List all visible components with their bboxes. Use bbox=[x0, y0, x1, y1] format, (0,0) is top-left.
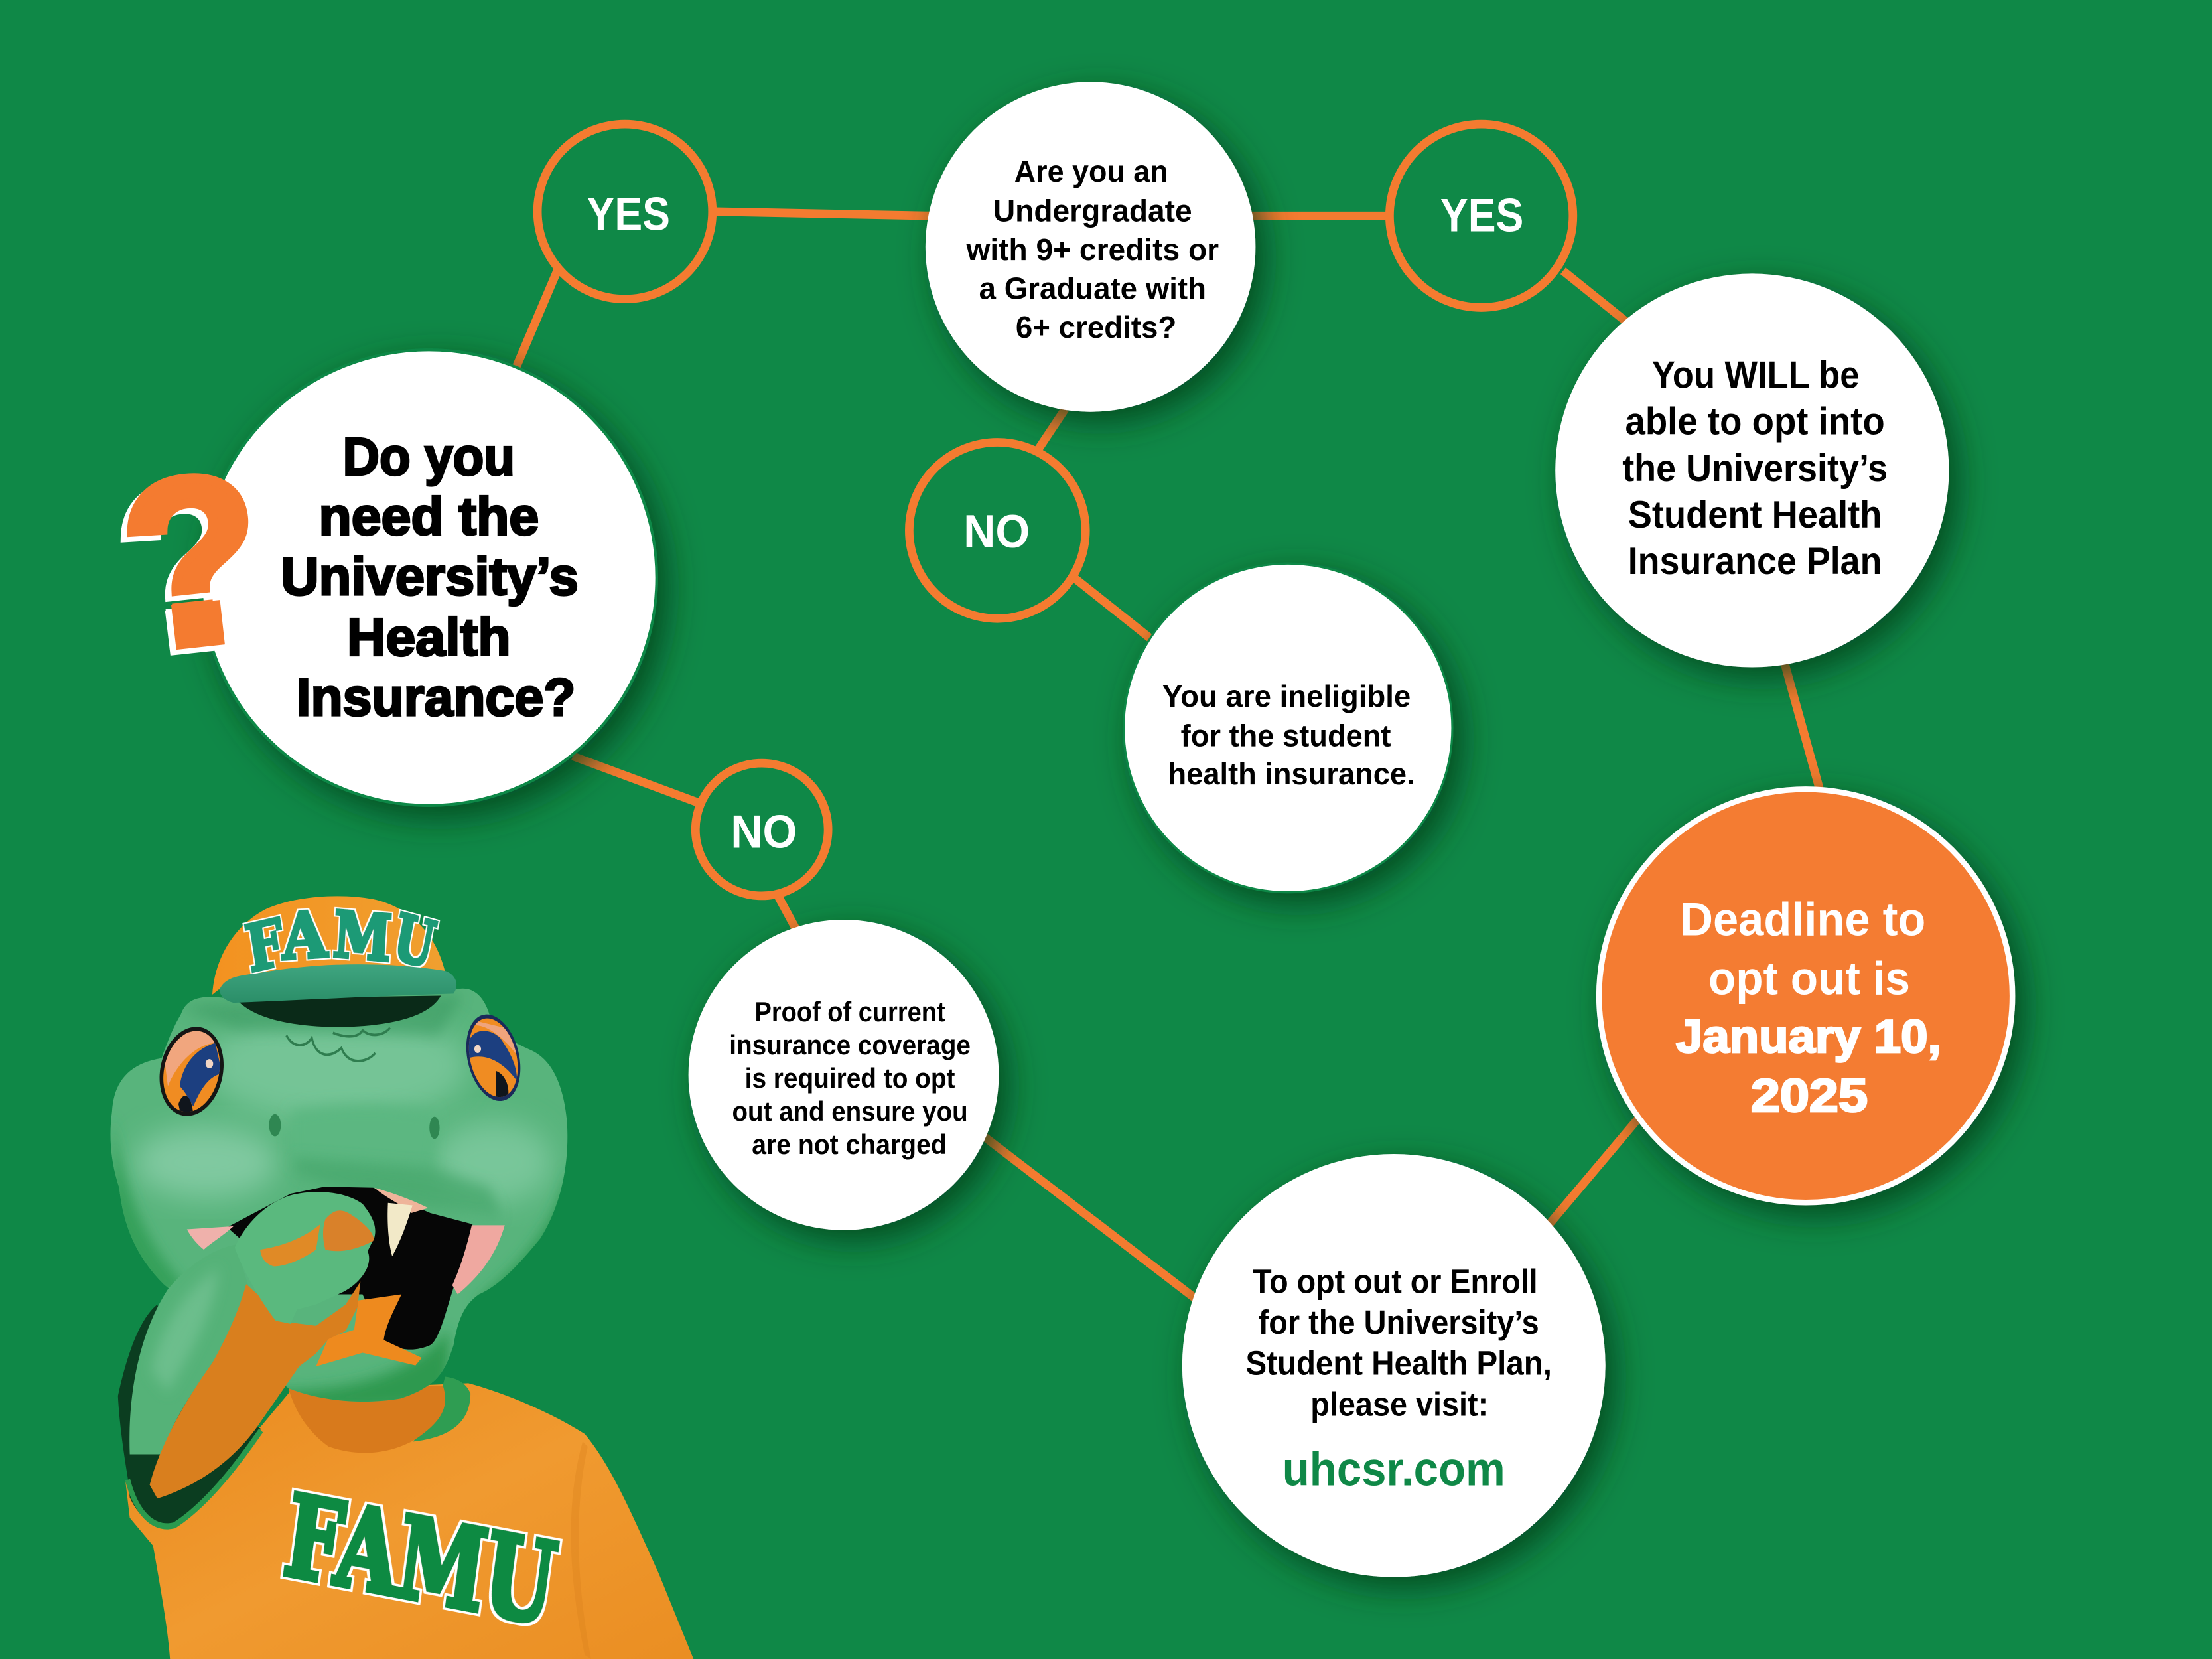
connector lines bbox=[516, 212, 1820, 1299]
panel: proof of coverage: out and ensure you bbox=[732, 1096, 968, 1127]
heading: main question: need the bbox=[319, 487, 539, 546]
mascot sleeve cuff bbox=[118, 1305, 261, 1526]
panel: opt out instructions: for the University’s bbox=[1259, 1303, 1539, 1341]
NO badge, lower: NO bbox=[730, 806, 797, 858]
palate bbox=[374, 1188, 428, 1213]
YES badge, second: YES bbox=[1440, 189, 1523, 242]
nostrils bbox=[269, 1114, 440, 1139]
panel: proof of coverage: are not charged bbox=[752, 1129, 947, 1160]
panel: opt in result: You WILL be bbox=[1652, 354, 1859, 397]
right gum bbox=[452, 1225, 505, 1294]
panel: ineligible result bbox=[1124, 563, 1452, 893]
panel: opt in result: the University’s bbox=[1622, 447, 1888, 490]
cuff trim bbox=[127, 1431, 261, 1526]
heading: main question: Health bbox=[347, 607, 511, 666]
panel: opt out instructions: please visit: bbox=[1310, 1385, 1488, 1423]
hand orange palm bbox=[150, 1281, 360, 1498]
brow scales bbox=[287, 1028, 390, 1061]
panel: opt in result: Insurance Plan bbox=[1628, 540, 1882, 583]
cap shadow on head bbox=[236, 995, 441, 1027]
NO badge, lower bbox=[695, 763, 828, 896]
panel: deadline: opt out is bbox=[1708, 952, 1910, 1005]
fang bbox=[387, 1203, 413, 1256]
finger edge bbox=[260, 1224, 320, 1266]
panel: deadline: Deadline to bbox=[1680, 893, 1925, 945]
mascot sleeve shadow bbox=[571, 1441, 591, 1659]
panel: proof of coverage: is required to opt bbox=[745, 1062, 955, 1094]
panel: enrollment question: a Graduate with bbox=[979, 271, 1206, 306]
panel: proof of coverage: Proof of current bbox=[755, 996, 945, 1027]
YES badge, first: YES bbox=[587, 188, 670, 240]
YES badge, second bbox=[1389, 124, 1573, 307]
panel: deadline: 2025 bbox=[1751, 1069, 1868, 1121]
left gum bbox=[187, 1226, 234, 1250]
mascot head bbox=[111, 989, 567, 1402]
heading: main question: University’s bbox=[281, 547, 579, 606]
cap brim bbox=[220, 964, 456, 1003]
panel: enrollment question: with 9+ credits or bbox=[966, 232, 1219, 267]
heading: main question: Do you bbox=[343, 427, 515, 486]
panel: opt out instructions: Student Health Plan, bbox=[1246, 1344, 1552, 1382]
fingertip bbox=[323, 1210, 374, 1251]
panel: opt out instructions bbox=[1182, 1154, 1606, 1577]
panel: enrollment question: 6+ credits? bbox=[1016, 310, 1176, 344]
mascot neck bbox=[289, 1386, 445, 1453]
hand back bbox=[235, 1192, 376, 1324]
panel: enrollment question: Undergradate bbox=[993, 194, 1192, 228]
panel: opt in result bbox=[1555, 273, 1949, 668]
cap lettering bbox=[241, 897, 441, 987]
heading: main question bbox=[281, 427, 579, 727]
panel: opt out instructions: To opt out or Enroll bbox=[1253, 1262, 1538, 1300]
NO badge, upper: NO bbox=[963, 505, 1030, 557]
shirt lettering: FAMU bbox=[278, 1469, 563, 1651]
panel: ineligible result: health insurance. bbox=[1168, 757, 1415, 791]
panel: proof of coverage bbox=[689, 920, 999, 1230]
heading: main question: Insurance? bbox=[297, 668, 576, 727]
mascot bbox=[111, 896, 693, 1659]
left eye bbox=[159, 1027, 224, 1116]
mascot collar bbox=[413, 1376, 470, 1441]
panel: deadline bbox=[1599, 789, 2012, 1202]
cap lettering: F bbox=[241, 904, 289, 987]
YES badge, first bbox=[537, 124, 713, 299]
head shading bbox=[113, 995, 574, 1411]
right eye bbox=[466, 1014, 520, 1101]
panel: deadline: January 10, bbox=[1676, 1010, 1941, 1062]
panel: ineligible result: You are ineligible bbox=[1162, 679, 1411, 713]
panel: main question bbox=[201, 350, 657, 806]
panel: enrollment question: Are you an bbox=[1014, 154, 1168, 188]
cap crown bbox=[212, 896, 456, 995]
mascot shirt bbox=[125, 1383, 693, 1659]
arm bbox=[129, 1244, 253, 1455]
panel: opt out instructions: uhcsr.com bbox=[1282, 1443, 1505, 1496]
NO badge, upper bbox=[909, 442, 1085, 618]
main question circle bbox=[201, 350, 657, 806]
cap lettering: A bbox=[280, 897, 330, 974]
mascot cap bbox=[212, 896, 456, 1003]
mouth interior bbox=[227, 1187, 472, 1350]
panel: enrollment question bbox=[926, 82, 1255, 412]
cap lettering: U bbox=[389, 899, 441, 982]
tongue bbox=[316, 1294, 422, 1366]
cap lettering: M bbox=[331, 897, 394, 976]
panel: proof of coverage: insurance coverage bbox=[729, 1029, 971, 1060]
icon: question mark: ? bbox=[112, 426, 273, 691]
panel: opt in result: Student Health bbox=[1628, 494, 1882, 536]
arm highlight bbox=[151, 1269, 219, 1391]
panel: opt in result: able to opt into bbox=[1625, 401, 1885, 443]
icon: question mark: ? bbox=[105, 431, 267, 696]
panel: ineligible result: for the student bbox=[1181, 719, 1391, 753]
